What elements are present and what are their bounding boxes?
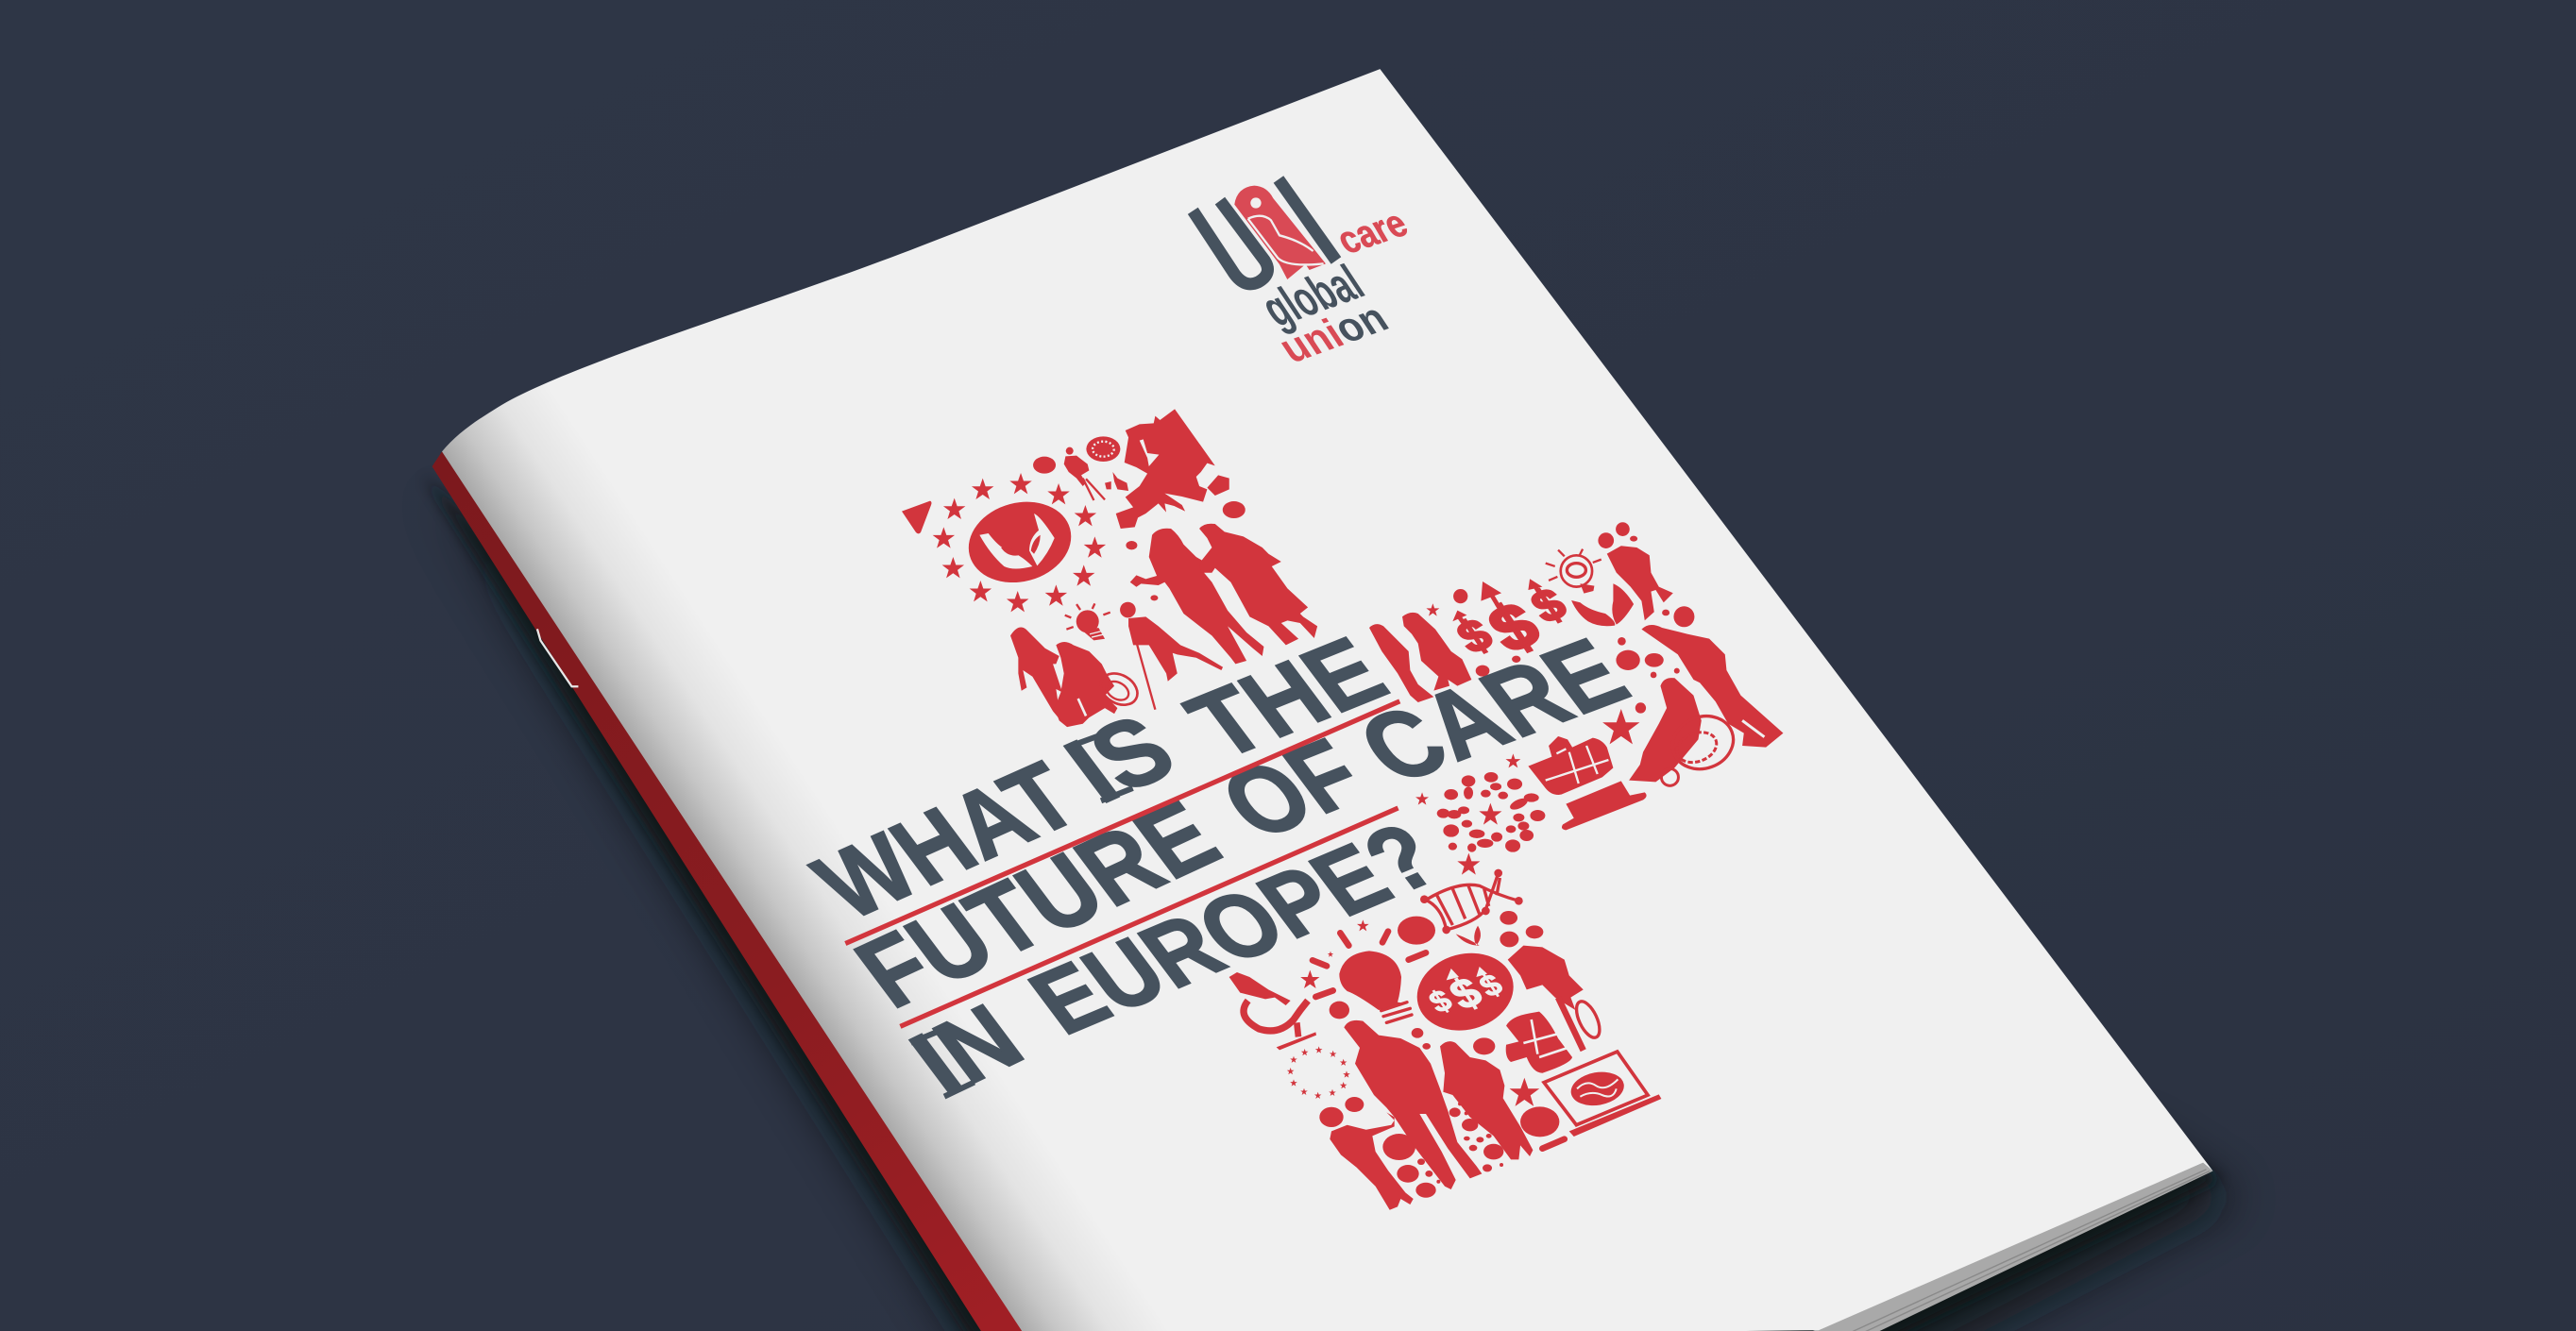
tall woman <box>1344 1020 1482 1189</box>
cover page <box>442 69 2212 1331</box>
microscope <box>1229 972 1316 1050</box>
large lightbulb <box>1339 951 1412 1022</box>
star and bar <box>1510 1078 1565 1149</box>
logo: UNI care global union <box>1193 179 1415 372</box>
dollar signs with rising arrows <box>1448 578 1575 666</box>
title line 1: THE <box>1167 617 1406 778</box>
page edge stack <box>1807 1163 2212 1331</box>
dollar signs with rising arrows: $ <box>1448 609 1501 663</box>
person on crutches <box>1120 602 1223 710</box>
star ring <box>933 473 1106 612</box>
title line 2: CARE <box>1337 618 1649 803</box>
dots <box>1330 911 1559 1198</box>
child <box>1319 1107 1414 1210</box>
hands <box>1571 583 1634 626</box>
wheelchair wheels <box>1665 708 1740 778</box>
title line 2 <box>835 618 1649 1028</box>
woman in long dress <box>1199 524 1317 645</box>
Europe map <box>1105 409 1229 529</box>
laptop with brain <box>1544 1052 1661 1137</box>
money badge <box>1408 943 1522 1041</box>
suitcase with plane <box>1506 1012 1572 1073</box>
dollar signs with rising arrows: $ <box>1476 589 1552 666</box>
small lightbulb <box>1065 603 1110 640</box>
logo word union: union <box>1270 295 1397 372</box>
title line 2: FUTURE <box>835 779 1240 1028</box>
brain lightbulb <box>1546 549 1602 594</box>
second woman <box>1440 1041 1533 1159</box>
title line 2: OF <box>1199 719 1384 859</box>
logo capsule icon <box>1234 186 1326 279</box>
man with backpack <box>1598 532 1673 620</box>
title line 3: IN <box>892 986 1042 1115</box>
logo letter I <box>1279 179 1336 261</box>
small leaf hands <box>1456 926 1481 946</box>
EU star ring <box>1287 1046 1350 1099</box>
logo word global: global <box>1251 255 1374 337</box>
dots <box>1033 457 1246 600</box>
carer pushing wheelchair <box>1629 625 1783 785</box>
staple <box>537 629 578 686</box>
triangle marker <box>902 501 932 533</box>
title line 1: WHAT <box>794 742 1098 938</box>
money badge: $ <box>1473 968 1509 1004</box>
stars <box>1415 603 1639 825</box>
bulb rays and stars <box>1300 919 1426 997</box>
slab serifs on letter I <box>911 736 1133 1097</box>
suitcase with plane <box>1528 736 1613 795</box>
title line 1: IS <box>1045 695 1195 822</box>
standing carer <box>1641 625 1783 748</box>
cross illustration: upper arm <box>902 409 1317 727</box>
logo letter U <box>1193 201 1268 284</box>
title line 3 <box>892 804 1459 1115</box>
seated person <box>1629 678 1702 782</box>
older woman <box>1402 613 1471 691</box>
booklet <box>432 69 2212 1331</box>
wheelchair user <box>1055 642 1143 727</box>
cyclist <box>1064 447 1105 500</box>
cyclist <box>1500 932 1604 1051</box>
title <box>794 617 1649 1115</box>
care hands badge <box>959 491 1080 594</box>
booklet shadow <box>424 477 2238 1331</box>
money badge: $ <box>1441 968 1490 1019</box>
dollar signs with rising arrows: $ <box>1522 578 1575 632</box>
slender woman <box>1369 624 1433 702</box>
title line 1 <box>794 617 1406 938</box>
hat shaped block <box>1562 781 1647 830</box>
cross illustration: lower arm <box>1229 853 1661 1210</box>
logo word care: care <box>1330 202 1415 262</box>
red spine <box>432 451 1035 1331</box>
woman beside wheelchair <box>1010 627 1062 720</box>
cross illustration: right arm <box>1369 522 1783 852</box>
woman with cup <box>1130 529 1263 664</box>
molecule cluster <box>1437 772 1545 852</box>
title rule lines <box>845 701 1399 1026</box>
money badge: $ <box>1423 984 1459 1019</box>
DNA helix <box>1420 869 1523 934</box>
star above DNA <box>1457 853 1480 875</box>
title line 3: EUROPE? <box>1010 804 1459 1053</box>
dots <box>1453 522 1694 714</box>
EU circle <box>1086 436 1120 462</box>
